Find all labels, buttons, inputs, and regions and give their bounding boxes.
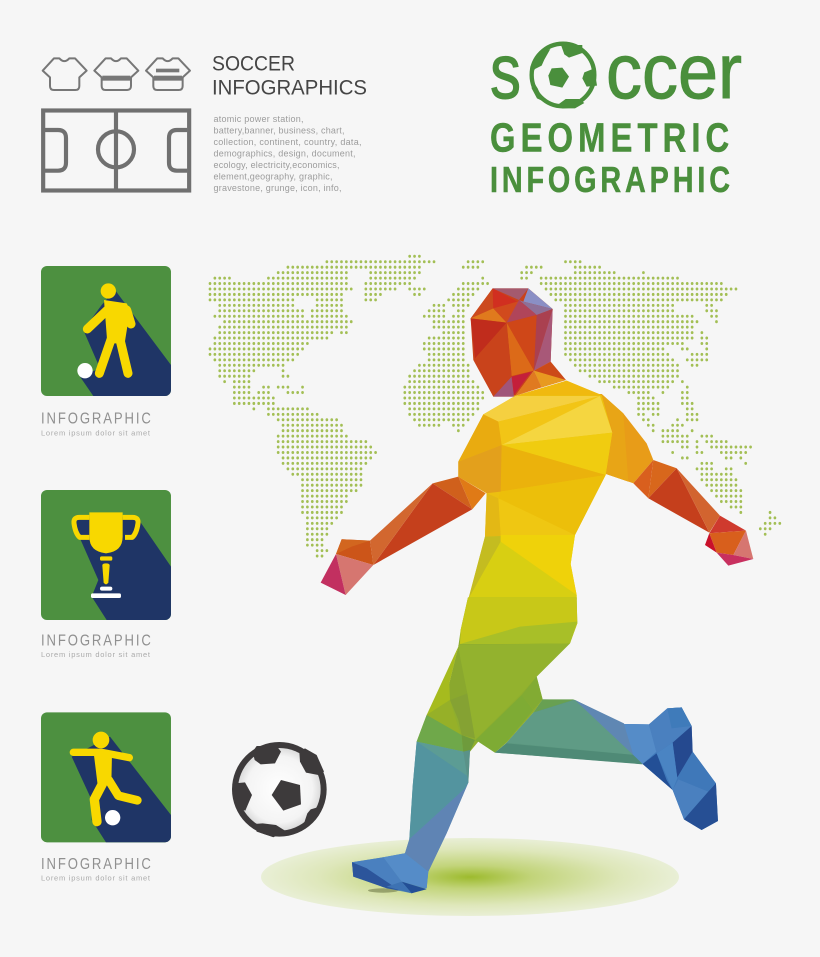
icon: trophy: [41, 490, 171, 620]
icon: jersey with two bands: [146, 58, 190, 90]
icon: jersey with one band: [94, 58, 138, 90]
text block: keywords: battery,banner, business, chart,: [214, 126, 344, 136]
panel: striking player card: [41, 712, 171, 882]
ground shadow: [261, 838, 679, 916]
caption: Lorem ipsum dolor sit amet: [41, 428, 151, 438]
caption: Lorem ipsum dolor sit amet: [41, 874, 151, 882]
panel: kicking player card: [41, 266, 171, 438]
icon: player with ball: [41, 266, 171, 396]
head: [471, 288, 566, 397]
polygon soccer player: [321, 288, 753, 893]
text block: keywords: collection, continent, country, data,: [214, 137, 362, 147]
icon: soccer pitch: [43, 110, 189, 190]
logo: soccer wordmark: s: [490, 27, 521, 115]
label: INFOGRAPHIC: [41, 410, 151, 428]
text block: keywords: gravestone, grunge, icon, info,: [214, 183, 342, 193]
right arm: [593, 394, 753, 566]
logo: soccer wordmark: ccer: [606, 27, 742, 115]
logo: soccer wordmark: [490, 27, 742, 200]
text block: keywords: element,geography, graphic,: [214, 172, 332, 182]
dotted world map: [210, 256, 780, 556]
label: INFOGRAPHIC: [41, 632, 151, 650]
text block: keywords: ecology, electricity,economics,: [214, 160, 340, 170]
legs and boots: [352, 597, 718, 893]
label: INFOGRAPHIC: [41, 856, 151, 873]
torso and left arm: [321, 381, 612, 600]
heading: soccer infographics: [212, 52, 367, 100]
logo: soccer wordmark: INFOGRAPHIC: [490, 159, 730, 200]
heading: soccer infographics: INFOGRAPHICS: [212, 76, 367, 100]
logo: soccer wordmark: GEOMETRIC: [490, 114, 729, 160]
text block: keywords: [214, 114, 362, 193]
panel: trophy card: [41, 490, 171, 659]
text block: keywords: atomic power station,: [214, 114, 304, 124]
soccer ball: [232, 742, 327, 837]
icon: green logo ball: [530, 42, 597, 108]
icon: plain jersey: [43, 58, 87, 90]
caption: Lorem ipsum dolor sit amet: [41, 650, 151, 659]
icon group: three jerseys: [43, 58, 190, 90]
icon: striker with ball: [41, 712, 171, 842]
text block: keywords: demographics, design, document,: [214, 148, 356, 158]
heading: soccer infographics: SOCCER: [212, 52, 295, 76]
